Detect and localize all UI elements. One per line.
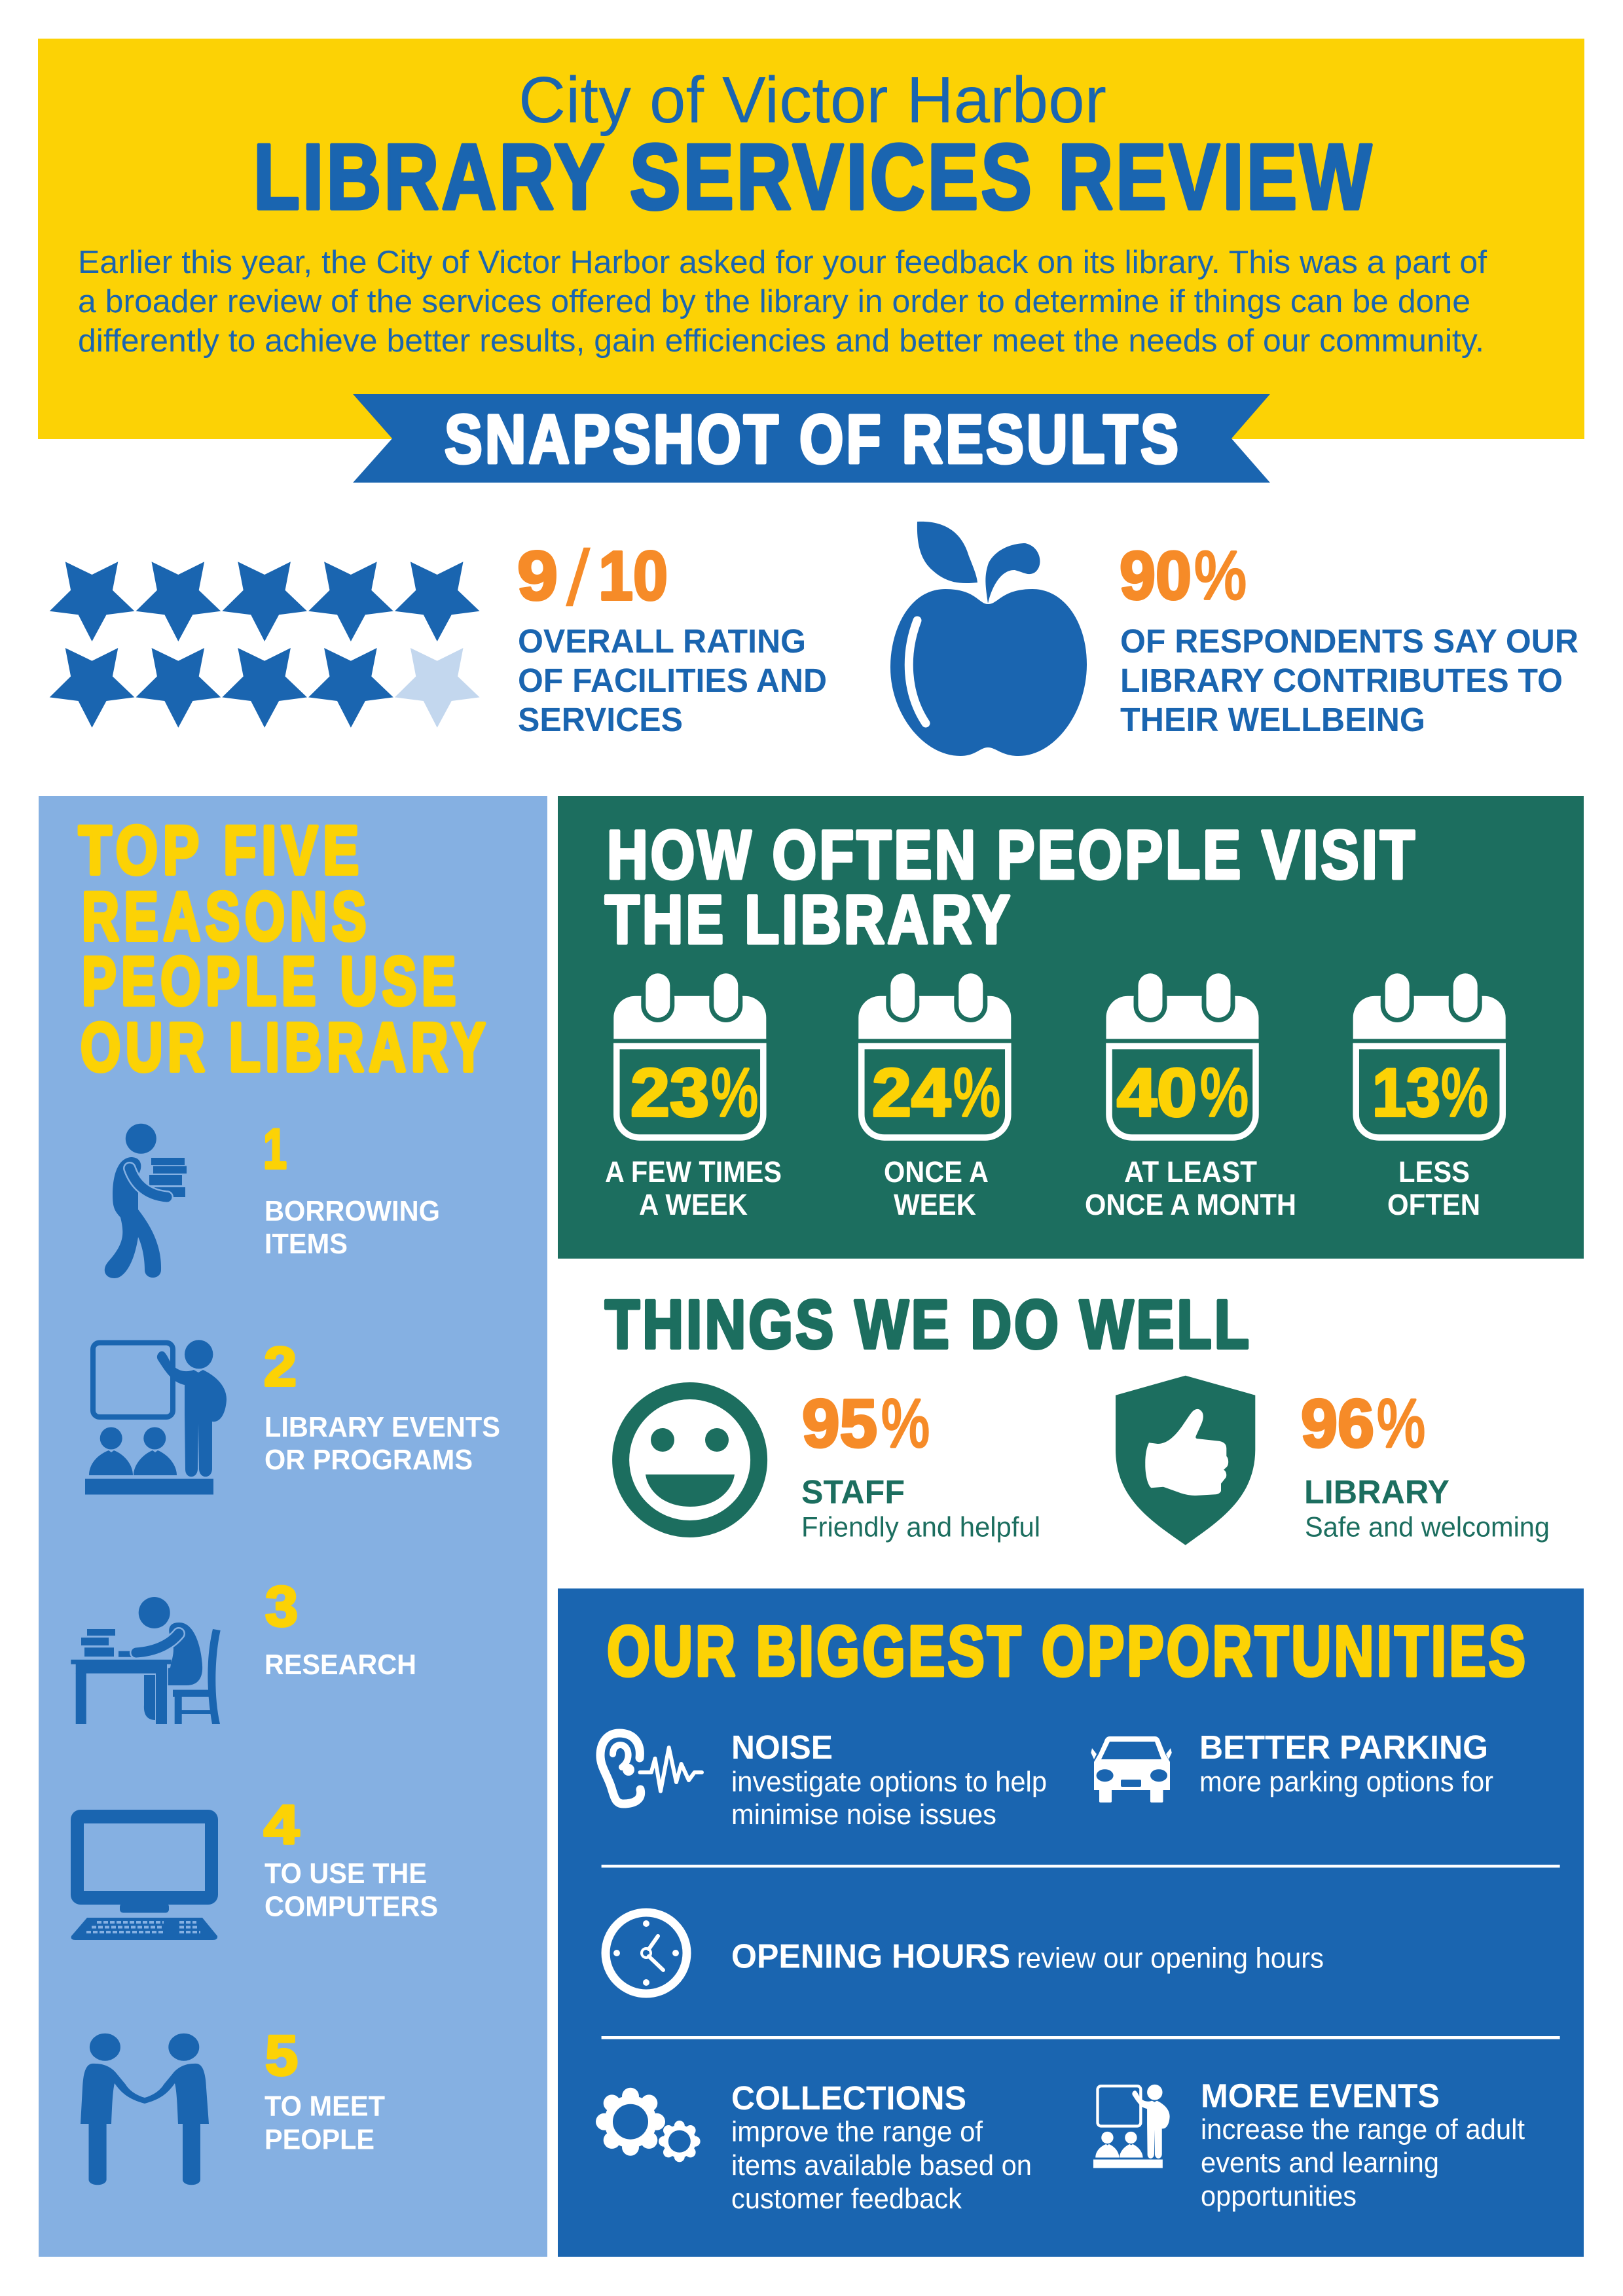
- text: wellbeing: [1120, 622, 1578, 738]
- text: collections: items available based on: [731, 2149, 1032, 2181]
- frequency labels: ONCE A: [884, 1155, 989, 1189]
- text: collections: customer feedback: [731, 2183, 962, 2215]
- icon: star rating 9 of 10: [50, 562, 480, 728]
- icon: apple: [890, 522, 1087, 756]
- text: collections: [731, 2079, 1032, 2215]
- calendar: 23% a few times a week: %: [711, 1055, 758, 1131]
- icon: two people shaking hands: [81, 2034, 209, 2185]
- text: collections: improve the range of: [731, 2116, 983, 2148]
- stat: 9/10: [517, 533, 668, 622]
- calendar: 24% once a week: %: [953, 1055, 1000, 1131]
- item 3 text: RESEARCH: [264, 1649, 416, 1681]
- heading: things we do well: THINGS WE DO WELL: [605, 1287, 1252, 1363]
- frequency labels: LESS: [1398, 1155, 1470, 1189]
- text: overall rating: SERVICES: [518, 701, 683, 738]
- stat: 96% library: [1301, 1386, 1550, 1543]
- stat: 96% library: Safe and welcoming: [1305, 1512, 1550, 1543]
- text: better parking: BETTER PARKING: [1199, 1729, 1488, 1766]
- icon: person researching at desk: [71, 1597, 221, 1724]
- icon: gears: [596, 2088, 701, 2162]
- text: better parking: [1199, 1729, 1493, 1798]
- stat: 9/10: 10: [598, 537, 668, 615]
- item 2 text: 2: [264, 1336, 297, 1397]
- icon: presenter and audience: [85, 1340, 227, 1495]
- stat: 95% staff: Friendly and helpful: [801, 1512, 1040, 1543]
- frequency labels: A FEW TIMES: [605, 1155, 782, 1189]
- heading: top five reasons: REASONS: [82, 878, 371, 955]
- item 1 text: ITEMS: [264, 1228, 348, 1260]
- text: more events: MORE EVENTS: [1201, 2077, 1440, 2114]
- item 4 text: TO USE THE: [264, 1857, 427, 1890]
- stat: 9/10: 9: [517, 537, 558, 615]
- title: library services review: LIBRARY SERVICES REVIEW: [253, 125, 1374, 229]
- intro paragraph: differently to achieve better results, gain efficiencies and better meet the needs of our community.: [78, 323, 1484, 359]
- text: wellbeing: OF RESPONDENTS SAY OUR: [1120, 622, 1578, 660]
- calendar: 13% less often: 13: [1372, 1055, 1440, 1131]
- item 2 text: [264, 1336, 500, 1476]
- calendar: 24% once a week: 24: [872, 1055, 951, 1131]
- calendar: 40% at least once a month: %: [1200, 1055, 1249, 1131]
- text: more events: opportunities: [1201, 2180, 1357, 2212]
- icon: person carrying books: [105, 1124, 187, 1278]
- text: noise: investigate options to help: [731, 1766, 1047, 1798]
- heading: top five reasons: [79, 812, 490, 1086]
- panel: top five reasons: [39, 796, 547, 2257]
- text: opening hours: OPENING HOURS: [731, 1937, 1010, 1975]
- stat: 96% library: %: [1377, 1386, 1425, 1462]
- stat: 95% staff: [801, 1386, 1040, 1543]
- item 5 text: TO MEET: [264, 2090, 385, 2123]
- text: better parking: more parking options for: [1199, 1766, 1493, 1798]
- text: noise: NOISE: [731, 1729, 833, 1766]
- item 2 text: LIBRARY EVENTS: [264, 1411, 500, 1443]
- text: overall rating: OF FACILITIES AND: [518, 662, 827, 699]
- text: more events: increase the range of adult: [1201, 2113, 1525, 2145]
- text: overall rating: OVERALL RATING: [518, 622, 806, 660]
- item 5 text: [264, 2024, 385, 2156]
- stat: 95% staff: 95: [802, 1386, 877, 1462]
- item 5 text: PEOPLE: [264, 2123, 374, 2156]
- text: more events: events and learning: [1201, 2147, 1439, 2179]
- item 5 text: 5: [265, 2024, 298, 2087]
- text: collections: COLLECTIONS: [731, 2079, 966, 2117]
- frequency labels: AT LEAST: [1124, 1155, 1257, 1189]
- icon: car: [1091, 1736, 1172, 1803]
- stat: 95% staff: %: [881, 1386, 930, 1462]
- calendar: 24% once a week: [858, 973, 1011, 1138]
- heading: top five reasons: OUR LIBRARY: [81, 1009, 490, 1086]
- text: opening hours: review our opening hours: [1017, 1942, 1324, 1974]
- stat: 96% library: 96: [1301, 1386, 1374, 1462]
- stat: 96% library: LIBRARY: [1304, 1473, 1450, 1511]
- frequency labels: A WEEK: [639, 1188, 748, 1221]
- stat: 90%: 90: [1120, 538, 1192, 614]
- stat: 95% staff: STAFF: [801, 1473, 905, 1511]
- text: opening hours: [731, 1937, 1324, 1975]
- item 1 text: [263, 1118, 440, 1260]
- text: wellbeing: THEIR WELLBEING: [1120, 701, 1425, 738]
- icon: small presenter: [1093, 2085, 1170, 2168]
- panel: our biggest opportunities: [558, 1588, 1584, 2257]
- heading: top five reasons: TOP FIVE: [79, 812, 364, 889]
- frequency labels: ONCE A MONTH: [1085, 1188, 1296, 1221]
- item 4 text: COMPUTERS: [264, 1890, 438, 1923]
- stat: 90%: %: [1194, 538, 1247, 614]
- calendar: 40% at least once a month: [1106, 973, 1259, 1138]
- panel: header: [38, 39, 1584, 439]
- item 1 text: BORROWING: [264, 1195, 440, 1227]
- intro paragraph: [78, 245, 1487, 359]
- item 3 text: 3: [265, 1575, 298, 1638]
- text: wellbeing: LIBRARY CONTRIBUTES TO: [1120, 662, 1563, 699]
- stat: 9/10: /: [566, 533, 591, 622]
- text: noise: minimise noise issues: [731, 1799, 996, 1831]
- icon: smiley face: [621, 1391, 759, 1529]
- icon: clock: [606, 1912, 687, 1994]
- calendar: 23% a few times a week: 23: [630, 1055, 709, 1131]
- item 2 text: OR PROGRAMS: [264, 1444, 473, 1476]
- stat: 90%: [1120, 538, 1247, 614]
- intro paragraph: Earlier this year, the City of Victor Harbor asked for your feedback on its library. This was a part of: [78, 245, 1487, 280]
- heading: top five reasons: PEOPLE USE: [82, 943, 461, 1020]
- item 3 text: [264, 1575, 416, 1681]
- icon: ear and sound wave: [600, 1733, 702, 1804]
- frequency labels: WEEK: [894, 1188, 976, 1221]
- icon: computer: [71, 1810, 218, 1940]
- text: more events: [1201, 2077, 1525, 2212]
- text: overall rating: [518, 622, 827, 738]
- item 4 text: 4: [264, 1794, 299, 1856]
- icon: shield with thumbs up: [1116, 1376, 1255, 1545]
- text: noise: [731, 1729, 1047, 1831]
- calendar: 40% at least once a month: 40: [1117, 1055, 1197, 1131]
- item 1 text: 1: [263, 1118, 287, 1181]
- heading: how often people visit the library: HOW OFTEN PEOPLE VISIT: [607, 817, 1417, 893]
- frequency labels: OFTEN: [1387, 1188, 1480, 1221]
- title: city name: City of Victor Harbor: [519, 63, 1106, 137]
- frequency labels: [605, 1155, 1480, 1221]
- banner: snapshot of results: SNAPSHOT OF RESULTS: [445, 401, 1181, 478]
- calendar: 23% a few times a week: [613, 973, 766, 1138]
- heading: how often people visit the library: THE LIBRARY: [605, 882, 1013, 958]
- calendar: 13% less often: %: [1441, 1055, 1488, 1131]
- panel: how often people visit: [558, 796, 1584, 1259]
- intro paragraph: a broader review of the services offered by the library in order to determine if things can be done: [78, 284, 1470, 319]
- calendar: 13% less often: [1353, 973, 1506, 1138]
- item 4 text: [264, 1794, 438, 1923]
- heading: how often people visit the library: [605, 817, 1417, 958]
